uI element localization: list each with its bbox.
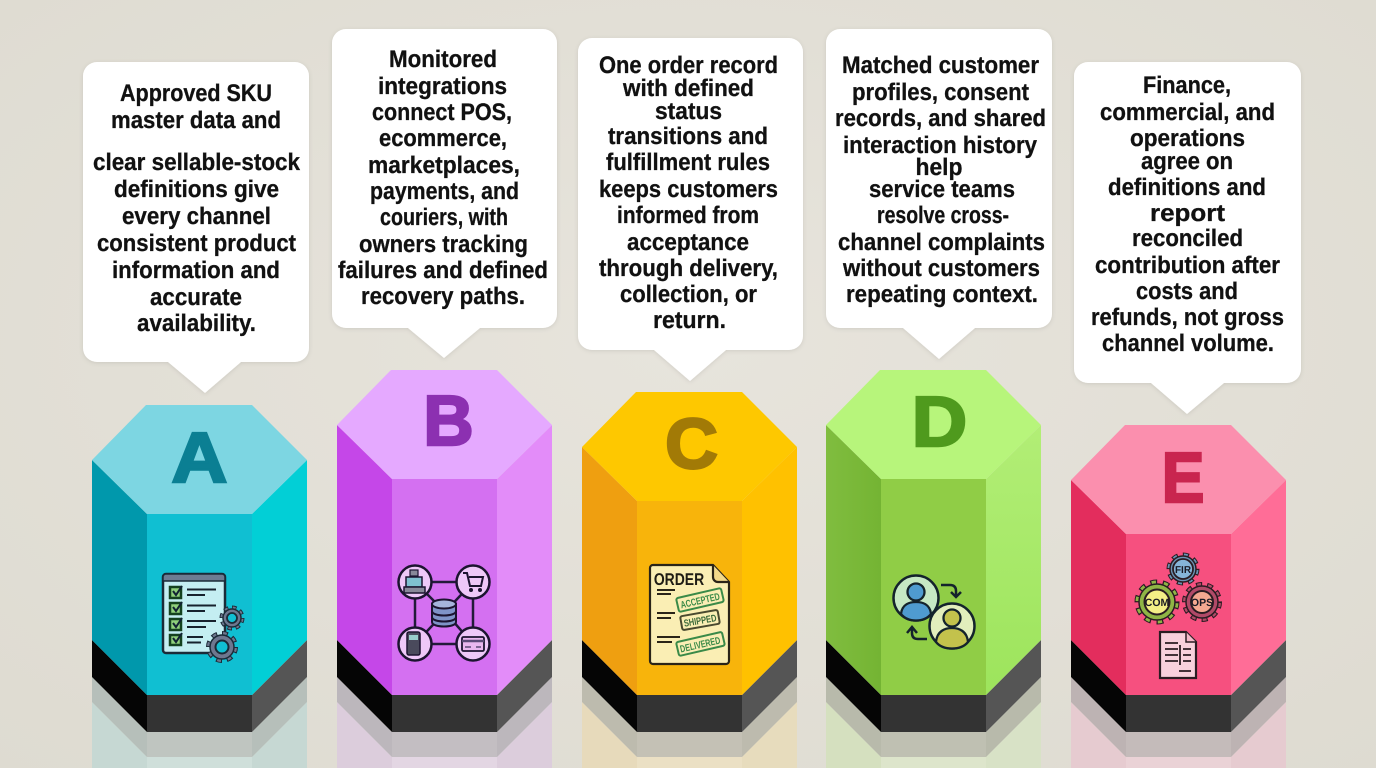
callout E: operations bbox=[1130, 125, 1245, 152]
icon: order document with status stamps: SHIPPED bbox=[683, 613, 717, 630]
callout A: definitions give bbox=[114, 176, 279, 203]
icon: connected systems around database bbox=[398, 566, 490, 660]
callout D: Matched customer bbox=[842, 52, 1039, 79]
callout D: profiles, consent bbox=[852, 79, 1029, 106]
letter C: C bbox=[665, 405, 718, 484]
callout C: return. bbox=[653, 307, 726, 334]
callout D: help bbox=[916, 154, 962, 181]
callout C bbox=[578, 38, 803, 381]
pillar B bbox=[337, 370, 552, 768]
callout E: agree on bbox=[1141, 148, 1233, 175]
callout B bbox=[332, 29, 557, 358]
letter E: E bbox=[1162, 439, 1204, 518]
icon: three gears and report: COM bbox=[1145, 597, 1170, 609]
callout C: acceptance bbox=[627, 229, 749, 256]
callout C: collection, or bbox=[620, 281, 757, 308]
callout B: integrations bbox=[378, 73, 507, 100]
callout C: status bbox=[655, 98, 722, 125]
callout D: repeating context. bbox=[846, 281, 1038, 308]
pillar C bbox=[582, 392, 797, 768]
pillar D bbox=[826, 370, 1041, 768]
callout E: report bbox=[1150, 200, 1225, 227]
icon: three gears and report: FIR bbox=[1175, 565, 1192, 576]
pillar A bbox=[92, 405, 307, 768]
callout E: channel volume. bbox=[1102, 330, 1274, 357]
callout B: connect POS, bbox=[372, 99, 512, 126]
callout A: accurate bbox=[150, 284, 242, 311]
callout B: owners tracking bbox=[359, 231, 528, 258]
letter B: B bbox=[423, 382, 474, 461]
icon: order document with status stamps bbox=[650, 565, 729, 664]
callout B: payments, and bbox=[370, 178, 519, 205]
callout B: marketplaces, bbox=[368, 152, 520, 179]
callout D bbox=[826, 29, 1052, 359]
icon: three gears and report: OPS bbox=[1191, 597, 1213, 609]
callout E: commercial, and bbox=[1100, 99, 1275, 126]
callout E: Finance, bbox=[1143, 72, 1231, 99]
callout A: consistent product bbox=[97, 230, 296, 257]
icon: matched customer profiles bbox=[894, 576, 974, 648]
callout C: informed from bbox=[617, 202, 759, 229]
callout A bbox=[83, 62, 309, 393]
callout E: definitions and bbox=[1108, 174, 1266, 201]
callout A: master data and bbox=[111, 107, 281, 134]
callout B: recovery paths. bbox=[361, 283, 525, 310]
icon: order document with status stamps: ORDER bbox=[654, 570, 704, 589]
callout D: channel complaints bbox=[838, 229, 1045, 256]
letter A: A bbox=[172, 419, 227, 498]
icon: order document with status stamps: ACCEPTED bbox=[680, 592, 721, 611]
callout E: contribution after bbox=[1095, 252, 1280, 279]
callout C: through delivery, bbox=[599, 255, 778, 282]
callout A: every channel bbox=[122, 203, 271, 230]
letter D: D bbox=[912, 383, 967, 462]
icon: order document with status stamps: DELIVERED bbox=[679, 635, 722, 655]
icon: three gears and report bbox=[1138, 556, 1218, 678]
callout C: One order record bbox=[599, 52, 778, 79]
icon: checklist with gears bbox=[163, 574, 242, 660]
callout A: Approved SKU bbox=[120, 80, 272, 107]
callout B: couriers, with bbox=[380, 204, 508, 231]
callout B: failures and defined bbox=[338, 257, 548, 284]
callout E bbox=[1074, 62, 1301, 414]
callout D: service teams bbox=[869, 176, 1015, 203]
callout E: refunds, not gross bbox=[1091, 304, 1284, 331]
callout B: Monitored bbox=[389, 46, 497, 73]
callout D: records, and shared bbox=[835, 105, 1046, 132]
callout C: keeps customers bbox=[599, 176, 778, 203]
callout C: with defined bbox=[622, 75, 754, 102]
callout C: fulfillment rules bbox=[606, 149, 770, 176]
callout C: transitions and bbox=[608, 123, 768, 150]
callout E: costs and bbox=[1136, 278, 1238, 305]
callout E: reconciled bbox=[1132, 225, 1243, 252]
callout A: availability. bbox=[137, 310, 256, 337]
pillar E bbox=[1071, 425, 1286, 768]
callout D: resolve cross- bbox=[877, 202, 1009, 229]
callout D: interaction history bbox=[843, 132, 1038, 159]
callout A: information and bbox=[112, 257, 280, 284]
callout A: clear sellable-stock bbox=[93, 149, 301, 176]
callout B: ecommerce, bbox=[379, 125, 507, 152]
callout D: without customers bbox=[842, 255, 1040, 282]
